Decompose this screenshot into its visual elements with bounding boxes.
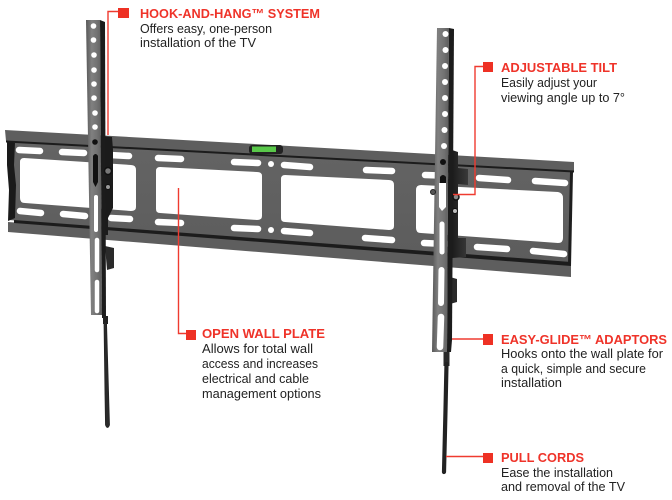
callout: easy-glide adaptors [452,332,667,390]
callout: hook-and-hang system [108,6,320,135]
callout: adjustable tilt [453,60,625,194]
left bracket dark edge [100,20,106,318]
description: Allows for total wall [202,342,313,356]
left cord strands [104,322,110,428]
right bracket dark edge [447,28,454,352]
description: electrical and cable [202,372,309,386]
top rail shadow [6,140,574,172]
leader line [453,66,483,194]
left pull cord [103,316,110,428]
marker [483,453,493,463]
callout: pull cords [446,450,626,494]
bottom rail [8,222,571,277]
heading: PULL CORDS [501,450,584,465]
heading: HOOK-AND-HANG™ SYSTEM [140,6,320,21]
lower slots [20,211,564,254]
heading: OPEN WALL PLATE [202,326,325,341]
plate left edge [7,141,16,221]
leader line [178,188,186,334]
description: Hooks onto the wall plate for [501,347,663,361]
heading: ADJUSTABLE TILT [501,60,617,75]
marker [186,330,196,340]
description: Offers easy, one-person [140,22,272,36]
left bracket black hole [92,139,98,145]
left bracket face [86,20,102,315]
description: Ease the installation [501,466,613,480]
right bracket black hole [440,159,446,165]
left bracket rear shadow [103,136,113,235]
description: Easily adjust your [501,76,597,90]
leader line [446,456,483,458]
right bracket lower clip [450,277,457,304]
heading: EASY-GLIDE™ ADAPTORS [501,332,667,347]
plate body [9,142,572,266]
right cord body [444,364,446,472]
right bracket screws [453,194,459,200]
left bracket screws [104,168,112,174]
left bracket slots [93,154,98,187]
description: installation of the TV [140,36,257,50]
right bracket rear shadow [452,150,468,258]
left bracket lower clip [105,246,114,270]
description: management options [202,387,321,401]
description: installation [501,376,562,390]
wall plate [5,130,574,277]
right cord collar [444,352,450,366]
marker [483,334,493,345]
open window 1 [20,158,136,211]
open window 3 [281,175,394,230]
open window 4 [416,185,563,243]
mounting holes [268,161,274,233]
marker [483,62,493,72]
right pull cord [444,352,450,472]
bottom rail shadow [14,220,571,266]
marker [118,8,129,18]
right bracket slots [440,175,446,183]
top rail [5,130,574,171]
right adaptor bracket [430,28,468,352]
right bracket holes [441,31,448,149]
left adaptor bracket [86,20,114,318]
callout: open wall plate [178,188,325,401]
description: and removal of the TV [501,480,626,494]
bubble level [249,145,283,154]
description: a quick, simple and secure [501,362,646,376]
description: access and increases [202,357,318,371]
left bracket holes [91,23,98,130]
left cord collar [103,316,108,324]
leader line [452,338,483,340]
open window 2 [156,167,262,220]
upper slots [19,150,565,183]
right bracket face [432,28,449,352]
plate right edge [568,172,573,266]
leader line [108,12,118,135]
description: viewing angle up to 7° [501,91,625,105]
